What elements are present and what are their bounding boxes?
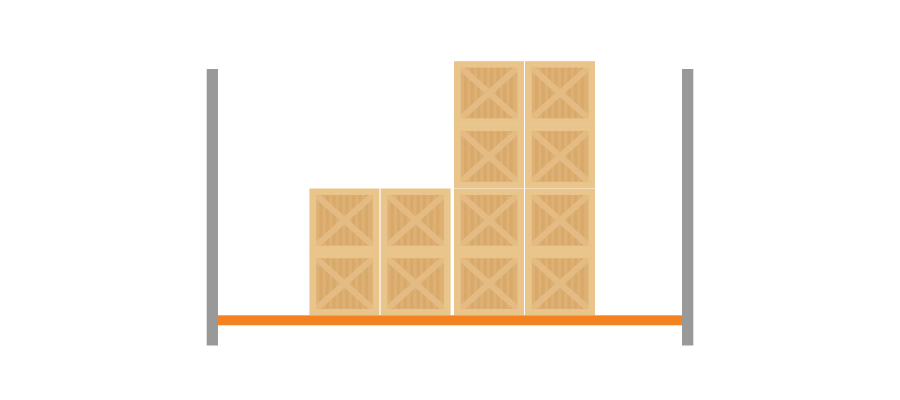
orange shelf beam	[218, 315, 682, 325]
crate: fourth column top	[525, 61, 595, 125]
crate: fourth column bottom	[525, 252, 595, 315]
rack illustration	[206, 61, 694, 346]
crates: left stack	[309, 188, 451, 315]
right upright post	[682, 69, 693, 346]
crate: left column upper	[309, 188, 379, 252]
crate: third column bottom	[454, 252, 524, 315]
crate: third column third	[454, 188, 524, 252]
crate: second column lower	[381, 252, 451, 315]
crate: fourth column third	[525, 188, 595, 252]
crate: fourth column second	[525, 125, 595, 188]
left upright post	[207, 69, 218, 346]
crate: third column top	[454, 61, 524, 125]
crates: right stack	[454, 61, 595, 315]
crate: third column second	[454, 125, 524, 188]
crate: second column upper	[381, 188, 451, 252]
crate: left column lower	[309, 252, 379, 315]
